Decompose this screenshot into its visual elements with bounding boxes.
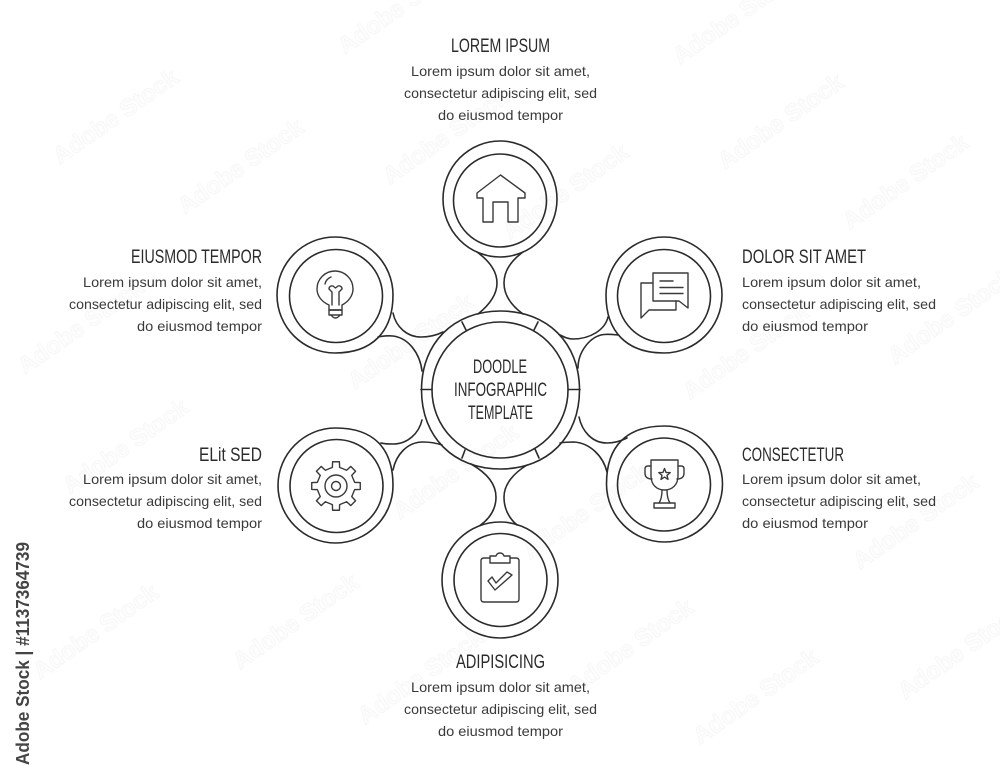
text block: consectetur: consectetur adipiscing elit, sed bbox=[742, 493, 936, 509]
text block: dolor sit amet: DOLOR SIT AMET bbox=[742, 247, 866, 268]
text: Adobe Stock bbox=[498, 138, 634, 245]
text block: consectetur bbox=[742, 445, 936, 531]
text: Adobe Stock bbox=[353, 623, 489, 730]
text block: lorem ipsum bbox=[404, 36, 597, 123]
text: Adobe Stock bbox=[343, 288, 479, 395]
central hub bbox=[421, 311, 580, 469]
text block: eiusmod tempor: consectetur adipiscing elit, sed bbox=[69, 296, 262, 312]
text: Adobe Stock bbox=[13, 273, 149, 380]
hub title: INFOGRAPHIC bbox=[454, 380, 547, 401]
text block: adipisicing: Lorem ipsum dolor sit amet, bbox=[411, 679, 590, 695]
text: Adobe Stock bbox=[848, 468, 984, 575]
text block: dolor sit amet bbox=[742, 247, 936, 334]
node: home bbox=[443, 141, 557, 257]
text block: lorem ipsum: Lorem ipsum dolor sit amet, bbox=[411, 63, 590, 79]
text block: dolor sit amet: do eiusmod tempor bbox=[742, 318, 868, 334]
text: Adobe Stock bbox=[518, 458, 654, 565]
text: Adobe Stock bbox=[378, 83, 514, 190]
text block: elit sed: do eiusmod tempor bbox=[137, 515, 262, 531]
node: checklist bbox=[442, 522, 558, 638]
node: trophy bbox=[606, 426, 722, 542]
text: Adobe Stock bbox=[58, 393, 194, 500]
text block: adipisicing: do eiusmod tempor bbox=[438, 723, 563, 739]
text: Adobe Stock bbox=[563, 593, 699, 700]
text block: elit sed bbox=[69, 445, 262, 531]
hub title: TEMPLATE bbox=[468, 403, 533, 424]
node: chat bbox=[606, 237, 722, 353]
text: Adobe Stock bbox=[173, 113, 309, 220]
text block: consectetur: Lorem ipsum dolor sit amet, bbox=[742, 471, 921, 487]
connectors between hub and nodes bbox=[378, 252, 627, 526]
text: Adobe Stock bbox=[28, 578, 164, 685]
hub title bbox=[454, 357, 547, 424]
text: Adobe Stock bbox=[228, 568, 364, 675]
text block: eiusmod tempor: Lorem ipsum dolor sit amet, bbox=[83, 274, 262, 290]
stock attribution label: Adobe Stock | #1137364739 bbox=[13, 542, 33, 765]
text block: adipisicing bbox=[404, 652, 597, 739]
text block: consectetur: CONSECTETUR bbox=[742, 445, 844, 466]
node: settings bbox=[278, 428, 393, 543]
icon: light bulb bbox=[317, 271, 353, 318]
text block: elit sed: Lorem ipsum dolor sit amet, bbox=[83, 471, 262, 487]
icon: clipboard bbox=[481, 553, 519, 602]
text: Adobe Stock bbox=[688, 643, 824, 750]
text block: adipisicing: ADIPISICING bbox=[456, 652, 545, 673]
text block: eiusmod tempor: do eiusmod tempor bbox=[137, 318, 262, 334]
icon: speech bubbles bbox=[641, 273, 688, 318]
text: Adobe Stock bbox=[678, 298, 814, 405]
text block: dolor sit amet: Lorem ipsum dolor sit amet, bbox=[742, 274, 921, 290]
text block: eiusmod tempor: EIUSMOD TEMPOR bbox=[131, 247, 262, 268]
text block: lorem ipsum: LOREM IPSUM bbox=[451, 36, 550, 57]
text block: consectetur: do eiusmod tempor bbox=[742, 515, 868, 531]
text block: adipisicing: consectetur adipiscing elit, sed bbox=[404, 701, 597, 717]
node: idea bbox=[277, 237, 393, 353]
text block: lorem ipsum: consectetur adipiscing elit, sed bbox=[404, 85, 597, 101]
text: Adobe Stock bbox=[713, 68, 849, 175]
metaball diagram bbox=[277, 141, 722, 638]
text block: lorem ipsum: do eiusmod tempor bbox=[438, 107, 563, 123]
text: Adobe Stock bbox=[388, 418, 524, 525]
text block: elit sed: ELit SED bbox=[199, 445, 262, 466]
text: Adobe Stock bbox=[838, 128, 974, 235]
text block: dolor sit amet: consectetur adipiscing elit, sed bbox=[742, 296, 936, 312]
hub title: DOODLE bbox=[473, 357, 527, 378]
text: Adobe Stock bbox=[48, 63, 184, 170]
icon: house bbox=[477, 175, 525, 222]
text block: eiusmod tempor bbox=[69, 247, 262, 334]
icon: gear bbox=[312, 462, 360, 510]
text block: elit sed: consectetur adipiscing elit, sed bbox=[69, 493, 262, 509]
icon: trophy bbox=[645, 460, 684, 508]
